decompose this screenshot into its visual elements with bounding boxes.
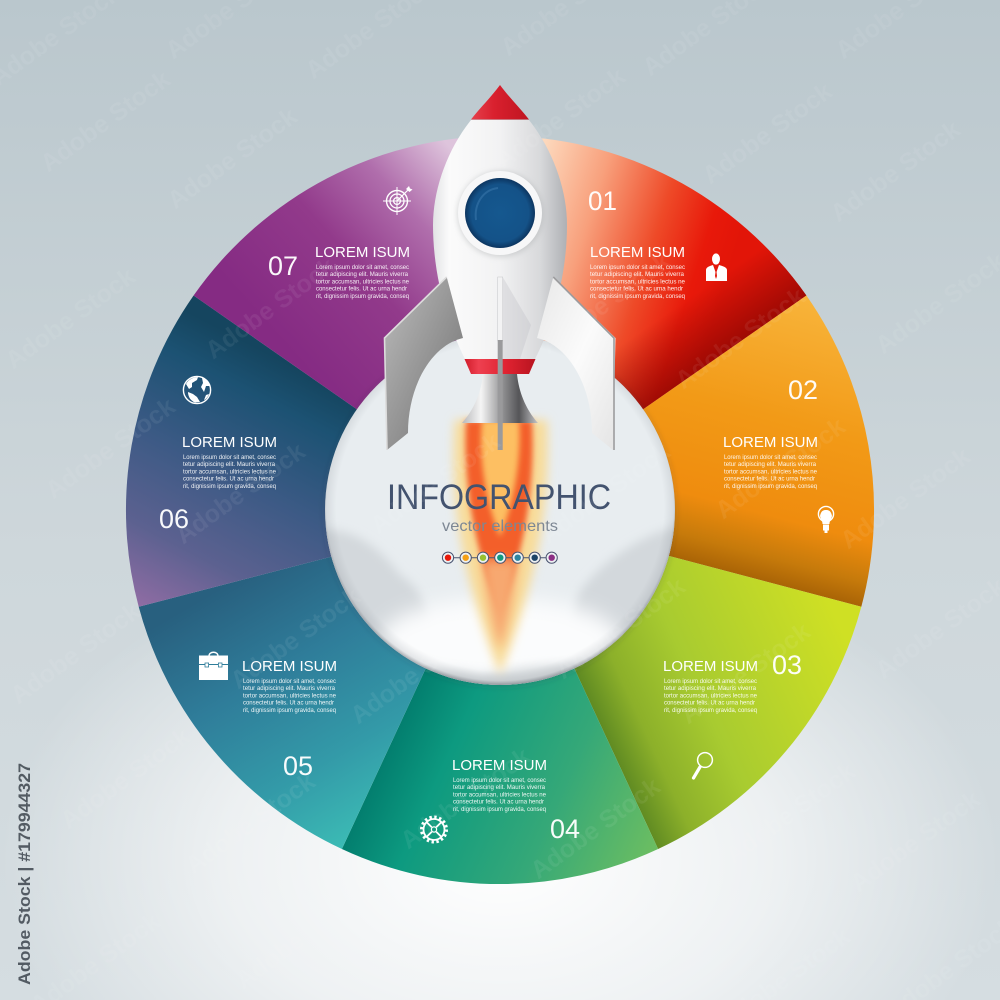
watermark pattern: Adobe Stock xyxy=(490,62,630,175)
right fin xyxy=(537,277,616,450)
watermark pattern: Adobe Stock xyxy=(845,785,985,898)
left fin xyxy=(384,277,463,450)
segment 4 green xyxy=(342,510,658,884)
center circle xyxy=(315,335,685,700)
heading 4: LOREM ISUM xyxy=(452,757,547,774)
watermark pattern: Adobe Stock xyxy=(550,572,690,685)
number 04: 04 xyxy=(550,814,580,844)
body 4: Lorem ipsum dolor sit amet, consec xyxy=(453,777,547,784)
watermark pattern: Adobe Stock xyxy=(225,582,365,695)
body 6: Lorem ipsum dolor sit amet, consec xyxy=(183,454,277,461)
body 3: rit, dignissim ipsum gravida, conseq xyxy=(664,707,757,714)
right smoke xyxy=(576,524,674,632)
number 02: 02 xyxy=(788,375,818,405)
orange flame tail xyxy=(482,560,518,650)
body 5: tortor accumsan, ultricies lectus ne xyxy=(243,692,336,699)
watermark pattern: Adobe Stock xyxy=(710,412,850,525)
stock id caption: Adobe Stock | #179944327 xyxy=(15,763,34,985)
outer flame xyxy=(454,420,547,675)
watermark pattern: Adobe Stock xyxy=(535,437,675,550)
exhaust smoke and flame xyxy=(315,420,685,700)
center fin xyxy=(498,277,503,450)
panel 2 text xyxy=(723,375,818,490)
body 7: Lorem ipsum dolor sit amet, consec xyxy=(316,264,410,271)
body 7: consectetur felis. Ut ac urna hendr xyxy=(316,286,408,293)
watermark pattern: Adobe Stock xyxy=(200,252,340,365)
heading 5: LOREM ISUM xyxy=(242,658,337,675)
watermark pattern: Adobe Stock xyxy=(525,772,665,885)
segment 5 teal xyxy=(139,510,500,849)
body 3: consectetur felis. Ut ac urna hendr xyxy=(664,700,756,707)
orange flame xyxy=(465,420,533,612)
body 1: tortor accumsan, ultricies lectus ne xyxy=(590,278,685,285)
watermark pattern: Adobe Stock xyxy=(697,77,837,190)
body 1: tetur adipiscing elit. Mauris viverra xyxy=(590,271,684,278)
flame core xyxy=(481,420,520,537)
porthole xyxy=(458,171,544,257)
watermark pattern: Adobe Stock xyxy=(5,597,145,710)
watermark pattern: Adobe Stock xyxy=(835,442,975,555)
heading 6: LOREM ISUM xyxy=(182,434,277,451)
watermark pattern: Adobe Stock xyxy=(670,282,810,395)
heading 1: LOREM ISUM xyxy=(590,244,685,261)
number 01: 01 xyxy=(588,186,617,216)
body 4: rit, dignissim ipsum gravida, conseq xyxy=(453,806,546,813)
number 06: 06 xyxy=(159,504,189,534)
rocket nose cone xyxy=(471,85,529,120)
body 2: Lorem ipsum dolor sit amet, consec xyxy=(724,454,818,461)
watermark pattern: Adobe Stock xyxy=(180,767,320,880)
rocket body shade xyxy=(503,277,531,359)
heading 2: LOREM ISUM xyxy=(723,434,818,451)
panel 3 text xyxy=(663,650,802,714)
watermark pattern: Adobe Stock xyxy=(230,882,370,995)
icon: businessman xyxy=(706,253,727,281)
segment 1 red xyxy=(500,136,806,510)
body 7: rit, dignissim ipsum gravida, conseq xyxy=(316,293,409,300)
number 05: 05 xyxy=(283,751,313,781)
panel 7 text xyxy=(268,244,410,300)
white fog xyxy=(380,598,620,682)
body 3: tetur adipiscing elit. Mauris viverra xyxy=(664,685,756,692)
watermark pattern: Adobe Stock xyxy=(170,437,310,550)
center title xyxy=(387,478,611,535)
circle base xyxy=(325,335,675,685)
watermark pattern: Adobe Stock xyxy=(720,757,860,870)
body 2 xyxy=(724,454,818,490)
heading 3: LOREM ISUM xyxy=(663,658,758,675)
body 4 xyxy=(453,777,547,813)
watermark pattern: Adobe Stock xyxy=(535,247,675,360)
circle outer shadow xyxy=(324,335,676,687)
body 2: tortor accumsan, ultricies lectus ne xyxy=(724,468,817,475)
body 5: consectetur felis. Ut ac urna hendr xyxy=(243,700,335,707)
seven step timeline xyxy=(442,552,557,563)
watermark pattern: Adobe Stock xyxy=(365,427,505,540)
title INFOGRAPHIC: INFOGRAPHIC xyxy=(387,478,611,517)
icon: magnifier xyxy=(694,753,712,778)
body 4: consectetur felis. Ut ac urna hendr xyxy=(453,799,545,806)
body 2: rit, dignissim ipsum gravida, conseq xyxy=(724,483,817,490)
lower grey fog xyxy=(432,662,580,685)
body 4: tetur adipiscing elit. Mauris viverra xyxy=(453,784,545,791)
panel 4 text xyxy=(452,757,580,844)
icon: light bulb xyxy=(818,506,834,533)
body 5: rit, dignissim ipsum gravida, conseq xyxy=(243,707,336,714)
body 3: tortor accumsan, ultricies lectus ne xyxy=(664,692,757,699)
segment 6 navy xyxy=(126,296,500,607)
segment 3 lime xyxy=(500,510,861,849)
icon: gear xyxy=(422,817,446,842)
body 1: Lorem ipsum dolor sit amet, consec xyxy=(590,264,686,271)
body 2: consectetur felis. Ut ac urna hendr xyxy=(724,476,816,483)
body 6 xyxy=(183,454,277,490)
watermark pattern: Adobe Stock xyxy=(162,102,302,215)
body 5 xyxy=(243,678,337,714)
watermark pattern: Adobe Stock xyxy=(35,65,175,178)
panel 6 text xyxy=(159,434,277,534)
body 7: tetur adipiscing elit. Mauris viverra xyxy=(316,271,408,278)
rocket body xyxy=(433,120,567,359)
body 1 xyxy=(590,264,686,300)
heading 7: LOREM ISUM xyxy=(315,244,410,261)
segment 2 orange xyxy=(500,296,874,607)
body 1: consectetur felis. Ut ac urna hendr xyxy=(590,286,684,293)
segment wheel xyxy=(126,136,874,884)
segment 7 purple xyxy=(194,136,500,510)
icon: globe xyxy=(183,376,211,404)
rocket xyxy=(384,85,616,450)
circle inner rim shading xyxy=(325,335,675,685)
panel 5 text xyxy=(242,658,337,781)
icon: target xyxy=(383,186,412,215)
body 4: tortor accumsan, ultricies lectus ne xyxy=(453,791,546,798)
body 5: Lorem ipsum dolor sit amet, consec xyxy=(243,678,337,685)
watermark pattern: Adobe Stock xyxy=(345,617,485,730)
body 6: consectetur felis. Ut ac urna hendr xyxy=(183,476,275,483)
watermark pattern: Adobe Stock xyxy=(395,742,535,855)
number 03: 03 xyxy=(772,650,802,680)
number 07: 07 xyxy=(268,251,298,281)
watermark pattern: Adobe Stock xyxy=(0,262,140,375)
rocket red band xyxy=(464,359,536,374)
body 7 xyxy=(316,264,410,300)
body 2: tetur adipiscing elit. Mauris viverra xyxy=(724,461,816,468)
panel 1 text xyxy=(588,186,686,300)
subtitle: vector elements xyxy=(442,518,558,535)
body 1: rit, dignissim ipsum gravida, conseq xyxy=(590,293,685,300)
watermark pattern: Adobe Stock xyxy=(675,617,815,730)
icon: briefcase xyxy=(199,652,228,680)
body 7: tortor accumsan, ultricies lectus ne xyxy=(316,278,409,285)
watermark pattern: Adobe Stock xyxy=(40,392,180,505)
watermark pattern: Adobe Stock xyxy=(55,722,195,835)
rocket nozzle xyxy=(462,374,538,423)
body 6: tortor accumsan, ultricies lectus ne xyxy=(183,468,276,475)
body 3 xyxy=(664,678,758,714)
body 6: rit, dignissim ipsum gravida, conseq xyxy=(183,483,276,490)
watermark pattern: Adobe Stock xyxy=(825,115,965,228)
body 5: tetur adipiscing elit. Mauris viverra xyxy=(243,685,335,692)
left smoke xyxy=(326,529,423,636)
body 6: tetur adipiscing elit. Mauris viverra xyxy=(183,461,275,468)
body 3: Lorem ipsum dolor sit amet, consec xyxy=(664,678,758,685)
